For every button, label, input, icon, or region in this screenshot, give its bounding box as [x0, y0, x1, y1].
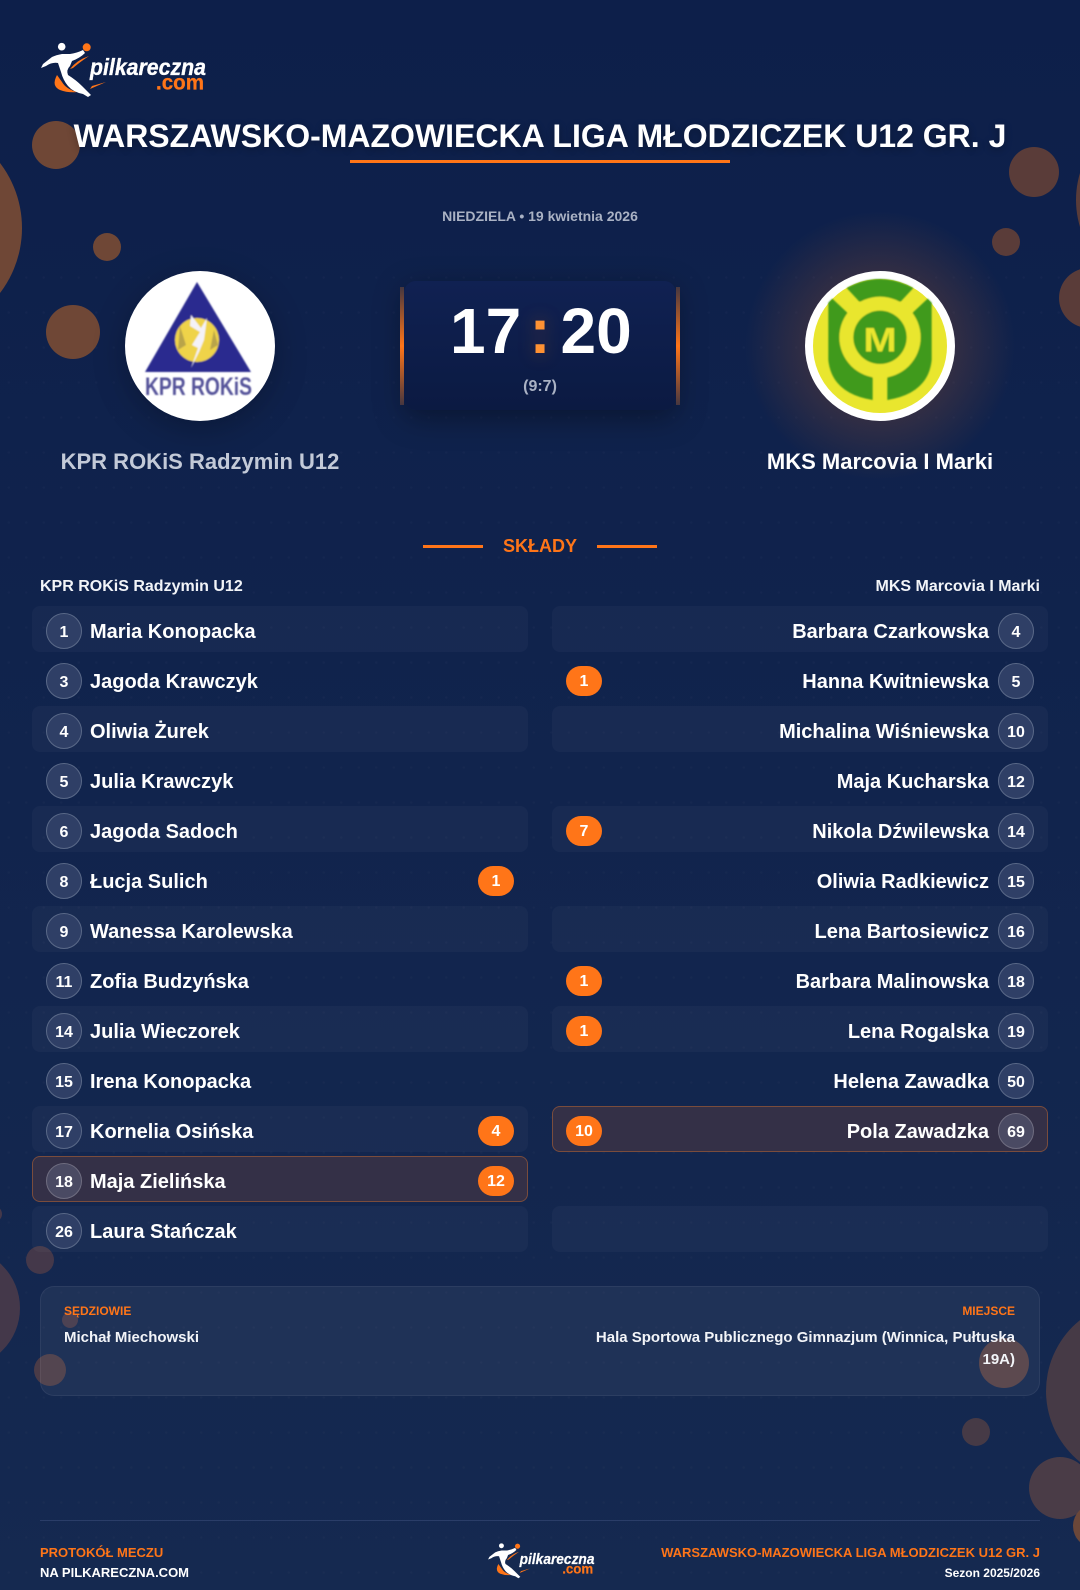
player row — [46, 1063, 252, 1099]
player row: 1 — [580, 673, 588, 690]
player row — [552, 806, 1048, 852]
match date: NIEDZIELA • 19 kwietnia 2026 — [442, 208, 638, 224]
player row: 15 — [1007, 874, 1025, 891]
player row: 6 — [60, 824, 68, 841]
empty row — [552, 1206, 1048, 1252]
player row — [32, 1006, 528, 1052]
team badge: KPR ROKiS — [125, 271, 275, 421]
team badge: MKS Marcovia — [805, 271, 955, 421]
player row: 18 — [1007, 974, 1025, 991]
player row: 1 — [580, 1023, 588, 1040]
player row: 11 — [56, 974, 72, 991]
player row: Jagoda Sadoch — [90, 821, 238, 843]
player row — [552, 606, 1048, 652]
player row: 4 — [1012, 624, 1020, 641]
player row — [46, 863, 514, 899]
away lineup title: MKS Marcovia I Marki — [876, 578, 1040, 595]
player row: Łucja Sulich — [90, 871, 208, 893]
player row: 9 — [60, 924, 68, 941]
player row: Irena Konopacka — [90, 1071, 251, 1093]
logo: pilkareczna.com — [41, 42, 206, 97]
player row: 12 — [1007, 774, 1025, 791]
player row — [32, 606, 528, 652]
player row: top scorer: Maja Zielińska — [90, 1171, 226, 1193]
away score: 20 — [560, 295, 632, 367]
player row: Oliwia Radkiewicz — [817, 871, 989, 893]
player row: top scorer: 10 — [575, 1123, 593, 1140]
player row: Maja Kucharska — [837, 771, 989, 793]
player row: 5 — [1012, 674, 1020, 691]
player row — [32, 1106, 528, 1152]
wordmark: pilkareczna — [89, 54, 206, 80]
player row: 3 — [60, 674, 68, 691]
player row — [32, 806, 528, 852]
player row: 7 — [580, 823, 588, 840]
player row — [817, 863, 1034, 899]
player row — [837, 763, 1034, 799]
player row: Lena Bartosiewicz — [814, 921, 989, 943]
player row: 15 — [55, 1074, 73, 1091]
score panel — [396, 287, 684, 426]
player row: 1 — [60, 624, 68, 641]
player row — [552, 706, 1048, 752]
player row: Oliwia Żurek — [90, 721, 209, 743]
lineups heading: SKŁADY — [503, 536, 577, 556]
player row: top scorer: 69 — [1007, 1124, 1025, 1141]
player row: top scorer: 18 — [55, 1174, 73, 1191]
footer league name: WARSZAWSKO-MAZOWIECKA LIGA MŁODZICZEK U12 GR. J — [661, 1545, 1040, 1560]
venue text: Hala Sportowa Publicznego Gimnazjum (Winnica, Pułtuska 19A) — [596, 1329, 1015, 1368]
lineups heading — [423, 536, 657, 556]
player row: Julia Krawczyk — [90, 771, 233, 793]
badge glow — [745, 211, 1015, 481]
player row: 1 — [492, 873, 500, 890]
footer logo: pilkareczna — [518, 1552, 594, 1568]
player row: 4 — [492, 1123, 500, 1140]
player row — [552, 1006, 1048, 1052]
player row: top scorer: Pola Zawadzka — [847, 1121, 989, 1143]
referee name: Michał Miechowski — [64, 1329, 199, 1346]
player row — [46, 663, 258, 699]
score box — [404, 281, 676, 410]
player row — [32, 706, 528, 752]
footer — [40, 1520, 1040, 1590]
venue label: MIEJSCE — [962, 1304, 1015, 1318]
player row — [32, 906, 528, 952]
wordmark: .com — [156, 72, 204, 94]
player row: Jagoda Krawczyk — [90, 671, 258, 693]
icon: handball player — [41, 43, 106, 97]
player row: Michalina Wiśniewska — [779, 721, 989, 743]
player row: Julia Wieczorek — [90, 1021, 240, 1043]
team badge: MKS Marcovia: M — [863, 321, 897, 359]
player row: 5 — [60, 774, 68, 791]
footer left text: NA PILKARECZNA.COM — [40, 1565, 189, 1580]
home lineup title: KPR ROKiS Radzymin U12 — [40, 578, 243, 595]
player row — [566, 963, 1034, 999]
player row: 1 — [580, 973, 588, 990]
player row: 8 — [60, 874, 68, 891]
panel: home lineup — [32, 613, 528, 1249]
panel: match info — [40, 1286, 1040, 1396]
player row: top scorer — [32, 1156, 528, 1202]
referees label: SĘDZIOWIE — [64, 1304, 131, 1318]
home team name: KPR ROKiS Radzymin U12 — [61, 449, 339, 474]
player row: 14 — [1007, 824, 1025, 841]
player row: 14 — [55, 1024, 73, 1041]
footer season: Sezon 2025/2026 — [945, 1566, 1040, 1580]
away team name: MKS Marcovia I Marki — [767, 449, 993, 474]
title underline — [350, 160, 730, 163]
panel: away lineup — [552, 613, 1048, 1152]
player row: Barbara Malinowska — [796, 971, 989, 993]
player row: 26 — [55, 1224, 73, 1241]
footer left label: PROTOKÓŁ MECZU — [40, 1545, 163, 1560]
player row — [552, 906, 1048, 952]
half-time score: (9:7) — [523, 378, 557, 395]
player row — [833, 1063, 1034, 1099]
player row — [566, 663, 1034, 699]
player row: Maria Konopacka — [90, 621, 256, 643]
player row: top scorer: 12 — [487, 1173, 505, 1190]
player row: Lena Rogalska — [848, 1021, 989, 1043]
player row — [46, 763, 234, 799]
left accent bar — [400, 287, 404, 405]
player row: 50 — [1007, 1074, 1025, 1091]
player row: Zofia Budzyńska — [90, 971, 249, 993]
player row: Hanna Kwitniewska — [802, 671, 989, 693]
player row: Nikola Dźwilewska — [812, 821, 989, 843]
player row: Helena Zawadka — [833, 1071, 989, 1093]
wordmark — [89, 54, 206, 94]
footer logo: .com — [562, 1562, 593, 1577]
player row: 16 — [1007, 924, 1025, 941]
footer logo — [488, 1543, 594, 1578]
score colon: : — [529, 295, 551, 367]
player row: 19 — [1007, 1024, 1025, 1041]
player row: top scorer — [552, 1106, 1048, 1152]
player row — [46, 963, 249, 999]
player row — [32, 1206, 528, 1252]
home score: 17 — [450, 295, 521, 367]
right accent bar — [676, 287, 680, 405]
player row: Barbara Czarkowska — [792, 621, 989, 643]
player row: Kornelia Osińska — [90, 1121, 253, 1143]
player row: Wanessa Karolewska — [90, 921, 293, 943]
player row: Laura Stańczak — [90, 1221, 237, 1243]
player row: 17 — [55, 1124, 73, 1141]
player row: 10 — [1007, 724, 1025, 741]
player row: 4 — [60, 724, 68, 741]
title: WARSZAWSKO-MAZOWIECKA LIGA MŁODZICZEK U12 GR. J — [74, 118, 1006, 154]
